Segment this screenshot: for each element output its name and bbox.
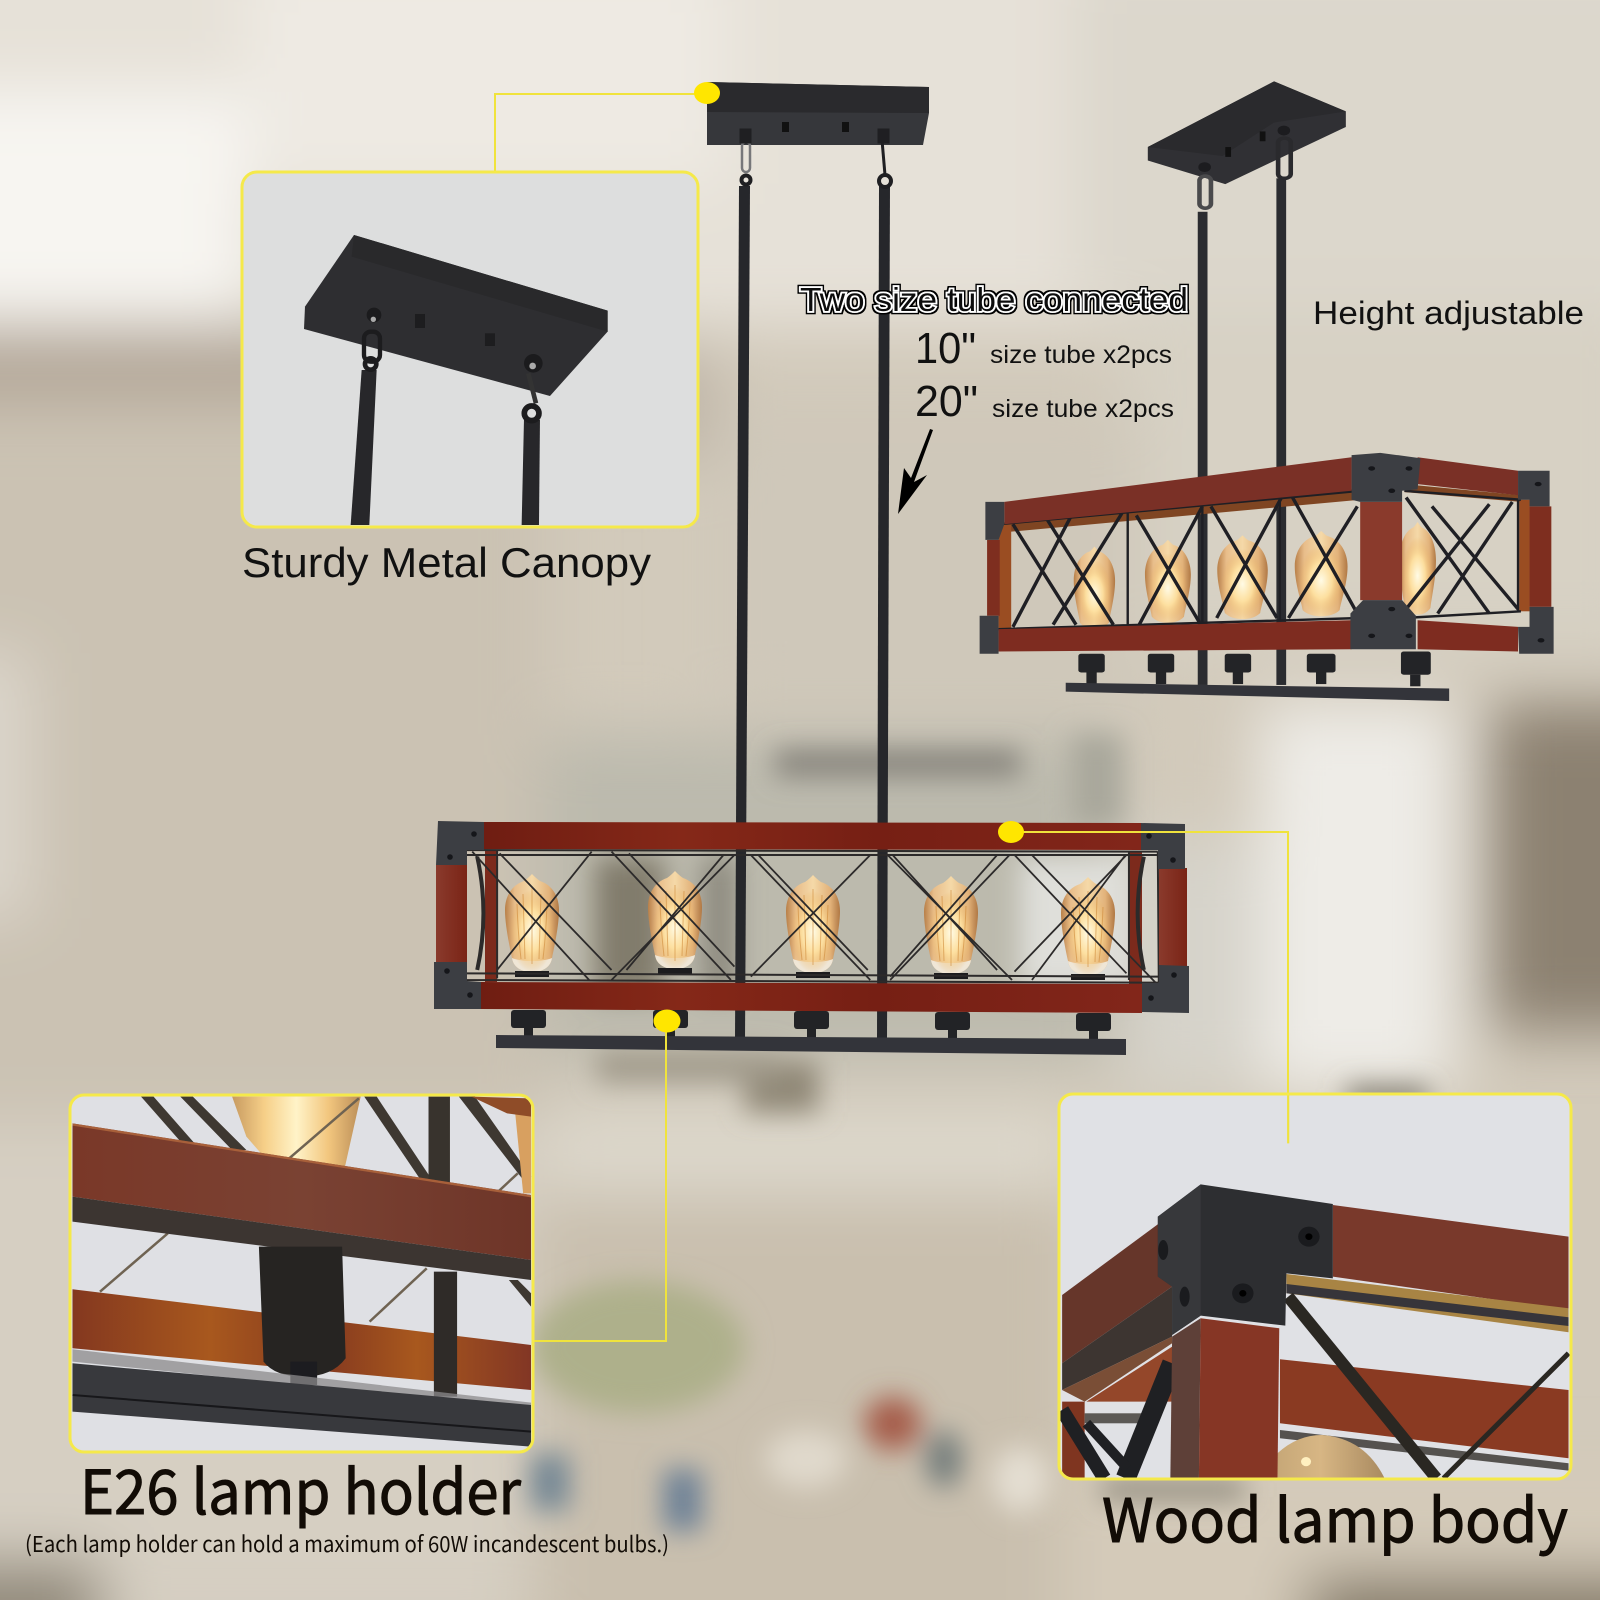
ceiling inside frame (1004, 489, 1360, 532)
label: E26 lamp holder: E26 lamp holder (80, 1443, 521, 1532)
heading: two size tube connected: Two size tube connected (800, 281, 1188, 318)
small lamp holders (1078, 651, 1431, 686)
connector: canopy callout line (495, 94, 707, 172)
vertical rod top (429, 1097, 450, 1187)
label: 10 inch tube: size tube x2pcs (990, 341, 1172, 369)
right hanging rod (522, 354, 543, 525)
close-up bulb (1277, 1435, 1385, 1478)
bulbs (505, 871, 1115, 980)
diagonal struts (1288, 1297, 1569, 1478)
label: 10 inch number: 10" (915, 324, 976, 373)
lower wood beam (72, 1289, 531, 1390)
canopy close-up (304, 235, 608, 396)
label: 20 inch tube: size tube x2pcs (992, 395, 1174, 423)
left hook and ring (741, 130, 750, 184)
lamp holders (511, 1010, 1111, 1040)
left far frame (1086, 1347, 1172, 1480)
connector: lamp holder callout line (533, 1021, 666, 1341)
small corner brackets (980, 453, 1554, 654)
beam underside (72, 1197, 531, 1280)
bracket screws (1158, 1227, 1320, 1307)
rods (1198, 178, 1286, 685)
bottom beam (481, 982, 1142, 1013)
small bracket screws (1368, 466, 1544, 643)
bottom metal bar (496, 1035, 1126, 1055)
angled canopy (1148, 81, 1346, 208)
wire cage (464, 850, 1159, 983)
top beam (484, 822, 1141, 850)
small bulbs (1074, 522, 1436, 629)
yellow dot: lamp holder (654, 1010, 680, 1032)
label: lamp holder wattage note: (Each lamp holder can hold a maximum of 60W incandescent bulbs.) (25, 1527, 669, 1559)
main pendant rods (735, 186, 890, 1040)
left hanging rod (351, 308, 381, 525)
wood callout line tail (1287, 1096, 1290, 1144)
panel: wood lamp body (1059, 1080, 1571, 1480)
label: sturdy metal canopy: Sturdy Metal Canopy (242, 539, 651, 586)
far rail and lower beam (1280, 1359, 1569, 1458)
thin diagonals (100, 1098, 518, 1322)
bracket screws (444, 831, 1177, 1001)
gold lit rail (1286, 1274, 1569, 1332)
right upper beam (1333, 1205, 1569, 1310)
right hook and ring (879, 130, 891, 187)
metal bar close-up (72, 1349, 531, 1408)
yellow dot: wood body (998, 821, 1024, 843)
small wood beams (987, 457, 1551, 651)
arrow: pointing to tube joint (898, 429, 933, 514)
panel: E26 lamp holder (70, 1095, 533, 1452)
panel: sturdy metal canopy (242, 172, 698, 527)
wood post (1170, 1318, 1201, 1478)
upper wood beam (72, 1123, 531, 1260)
vertical rod (434, 1272, 457, 1397)
label: height adjustable: Height adjustable (1313, 295, 1584, 331)
small wire cage (999, 491, 1521, 629)
metal corner bracket (1158, 1184, 1333, 1335)
close-up bulb (232, 1097, 361, 1168)
background bars (141, 1097, 531, 1307)
far-side wood posts (485, 850, 1142, 984)
label: 20 inch number: 20" (915, 377, 978, 426)
main canopy (707, 82, 929, 187)
side posts (436, 865, 1187, 966)
corner brackets (434, 821, 1189, 1013)
holder cylinder (259, 1247, 346, 1377)
main wooden fixture (434, 821, 1189, 1055)
left upper beam (1062, 1222, 1172, 1363)
connector: wood body callout line (1011, 832, 1288, 1143)
small bottom bar (1066, 683, 1449, 701)
lit far side posts (999, 500, 1530, 629)
yellow dot: canopy (694, 82, 720, 104)
secondary angled fixture (980, 81, 1554, 701)
label: wood lamp body: Wood lamp body (1102, 1473, 1568, 1560)
